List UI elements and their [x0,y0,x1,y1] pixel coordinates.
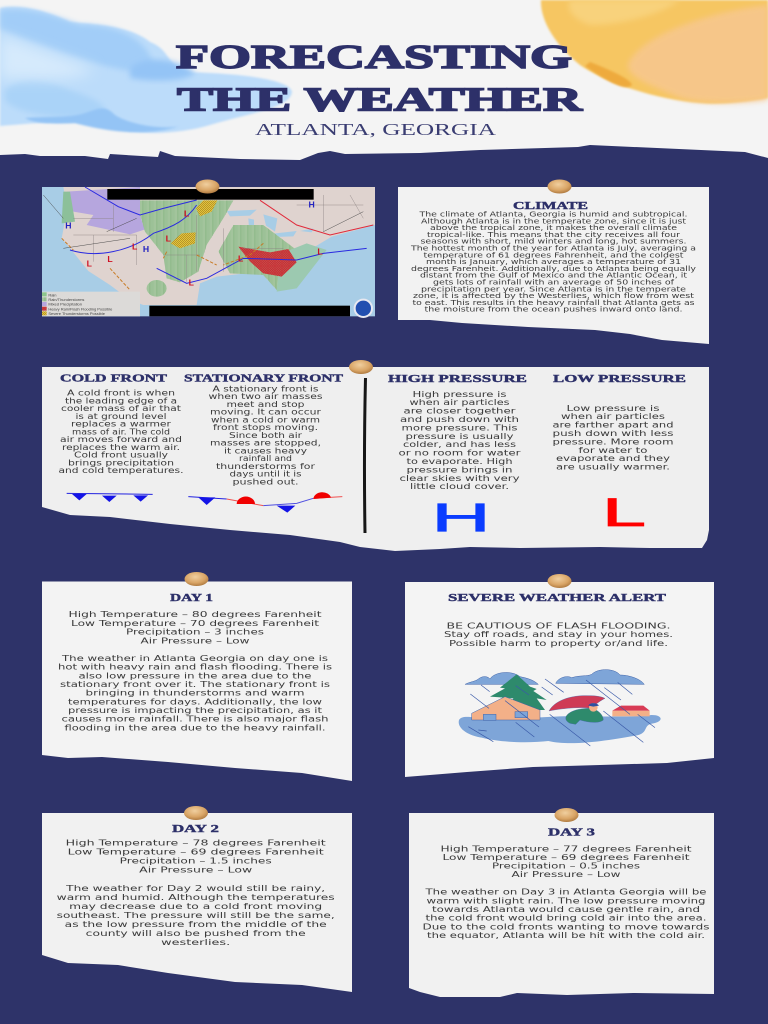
forecast text: southeast. The pressure will still be the same, [57,910,335,920]
stationary front text: when two air masses [208,392,322,401]
forecast text: the equator, Atlanta will be hit with the cold air. [427,930,705,940]
high pressure text: and push down with [400,415,519,424]
panel: day 2 [42,806,352,992]
high pressure text: clear skies with very [400,474,520,483]
stationary front text: moving. It can occur [210,408,322,417]
rain lines [468,679,655,746]
cold front text: is at ground level [76,412,166,421]
climate text: the moisture from the ocean pushes inward onto land. [424,306,682,314]
climate text: degrees Farenheit. Additionally, due to Atlanta being equally [411,265,696,273]
forecast text: warm and humid. Although the temperatures [57,892,335,902]
map legend: Rain [48,292,57,297]
stationary front text: days until it is [230,470,302,479]
map pressure labels: L [317,247,323,257]
map legend [42,292,140,316]
high pressure text: High pressure is [412,390,506,399]
climate text: seasons with short, mild winters and long, hot summers. [420,238,686,246]
map pressure labels: L [189,278,195,288]
heading: DAY 1 [170,593,213,604]
climate text: precipitation per year. Since Atlanta is in the temperate [421,285,686,293]
icon: agency logo [355,300,372,317]
panel: climate [398,180,709,344]
title: THE WEATHER [177,82,583,118]
forecast stats: Air Pressure – Low [140,635,250,645]
stationary front text: front stops moving. [213,423,318,432]
forecast text: bringing in thunderstorms and warm [86,688,305,698]
forecast text: The weather on Day 3 in Atlanta Georgia will be [424,887,706,897]
cold front text [58,389,184,475]
high pressure text: colder, and has less [403,440,516,449]
stationary front text: meet and stop [226,400,305,409]
map pressure labels: L [184,208,190,218]
climate text: distant from the Gulf of Mexico and the Atlantic Ocean, it [420,272,687,280]
climate text: The climate of Atlanta, Georgia is humid and subtropical. [418,210,688,218]
panel: severe weather alert [405,574,714,777]
heading: low pressure: LOW PRESSURE [553,374,686,385]
high pressure text: when air particles [410,398,510,407]
forecast stats: Precipitation – 3 inches [126,627,264,637]
forecast stats: High Temperature – 80 degrees Farenheit [68,609,323,619]
climate text: above the tropical zone, it makes the overall climate [430,224,677,232]
pin [184,572,208,586]
climate text [410,210,696,314]
flood water [459,715,661,743]
forecast text: warm with slight rain. The low pressure moving [426,895,706,905]
forecast stats: Air Pressure – Low [512,869,621,879]
map redaction bars [107,189,350,316]
heading: SEVERE WEATHER ALERT [448,593,666,604]
low pressure text: evaporate and they [556,454,671,463]
pin [184,806,208,820]
forecast text: stationary front over it. The stationary front is [60,679,330,689]
cold front text: Cold front usually [74,450,169,460]
forecast stats: Low Temperature – 70 degrees Farenheit [71,618,320,628]
cold front text: mass of air. The cold [72,427,170,436]
title: FORECASTING [176,39,572,76]
stationary front text: pushed out. [232,477,298,486]
forecast text [57,883,335,947]
forecast stats: Precipitation – 0.5 inches [492,860,640,870]
cold front text: air moves forward and [60,435,182,444]
heading: DAY 3 [548,828,595,839]
subtitle: ATLANTA, GEORGIA [255,120,496,139]
umbrella [549,696,605,711]
heading: DAY 2 [172,824,219,835]
climate text: to east. This results in the heavy rainfall that Atlanta gets as [412,299,695,307]
distant house [612,711,650,716]
low pressure text [552,404,674,472]
forecast text: the cold front would bring cold air into the area. [426,913,706,923]
alert text: BE CAUTIOUS OF FLASH FLOODING. [446,620,670,630]
map legend: Mixed Precipitation [48,302,82,307]
map pressure labels [65,200,323,288]
low pressure text: are farther apart and [552,421,674,430]
cold front text: and cold temperatures. [58,466,184,475]
forecast text: hot with heavy rain and flash flooding. There is [58,662,332,672]
forecast stats: Low Temperature – 69 degrees Farenheit [68,846,325,856]
heading: stationary front: STATIONARY FRONT [184,374,343,384]
icon: high pressure H: H [432,496,490,540]
high pressure text: little cloud cover. [410,482,509,491]
panel: day 1 [42,572,352,781]
icon: watercolor sun [541,0,768,104]
climate text: The hottest month of the year for Atlanta is July, averaging a [410,244,696,252]
forecast text: westerlies. [161,937,230,947]
map pressure labels: L [166,233,172,243]
forecast text: The weather in Atlanta Georgia on day one is [61,653,328,663]
cold front text: cooler mass of air that [61,404,181,413]
forecast stats: Precipitation – 1.5 inches [120,856,272,866]
panel: fronts and pressure [42,360,709,551]
high pressure text [398,390,522,491]
heading: high pressure: HIGH PRESSURE [388,374,527,385]
house [472,697,540,720]
forecast text: as the low pressure from the middle of the [65,919,327,929]
pin [196,180,220,194]
map pressure labels: L [87,259,93,269]
stationary front text: thunderstorms for [216,462,316,471]
forecast text: The weather for Day 2 would still be rainy, [65,883,325,893]
forecast text [422,887,710,940]
high pressure text: more pressure. This [402,423,518,432]
high pressure text: are closer together [404,407,517,416]
stationary front text: A stationary front is [212,384,318,393]
stationary front text: rainfall and [239,454,292,463]
person [566,708,603,724]
cold front text: A cold front is when [67,389,175,398]
divider brush line [364,378,366,533]
forecast text: may decrease due to a cold front moving [69,901,322,911]
stationary front text: when a cold or warm [211,415,320,424]
forecast text: causes more rainfall. There is also major flash [62,714,328,724]
low pressure text: push down with less [552,429,674,438]
alert text: Possible harm to property or/and life. [449,638,668,648]
header band [0,0,768,160]
alert text: Stay off roads, and stay in your homes. [444,629,673,639]
climate text: Although Atlanta is in the temperate zone, since it is just [421,217,686,225]
forecast stats: High Temperature – 78 degrees Farenheit [66,838,327,848]
icon: cold front symbol [67,493,153,502]
cold front text: replaces the warm air. [62,443,180,452]
forecast stats [440,843,693,879]
high pressure text: pressure brings in [406,465,513,474]
map legend: Severe Thunderstorms Possible [48,311,106,316]
cold front text: replaces a warmer [71,420,172,429]
tree [490,674,547,710]
icon: stationary front symbol [188,492,342,513]
forecast stats: Air Pressure – Low [139,864,253,874]
panel: weather map [42,187,375,317]
stationary front text: Since both air [229,431,303,440]
low pressure text: Low pressure is [566,404,660,413]
forecast text: Due to the cold fronts wanting to move towards [422,921,710,931]
clouds [465,670,644,684]
forecast text: county will also be pushed from the [86,928,306,938]
pin [548,574,572,588]
high pressure text: or no room for water [398,449,522,458]
forecast text: towards Atlanta would cause gentle rain, and [432,904,700,914]
alert text [444,620,673,648]
low pressure text: are usually warmer. [556,463,670,472]
pin [554,808,578,822]
forecast text [58,653,332,732]
map legend: Heavy Rain/Flash Flooding Possible [48,306,113,311]
pin [548,180,572,194]
forecast stats: Low Temperature – 69 degrees Farenheit [442,852,691,862]
forecast stats [66,838,327,874]
climate text: zone, it is affected by the Westerlies, which flow from west [413,292,694,300]
climate text: gets lots of rainfall with an average of 50 inches of [433,278,675,286]
cold front text: the leading edge of a [65,396,177,405]
icon: flood illustration [459,670,661,746]
high pressure text: pressure is usually [406,432,514,441]
low pressure text: when air particles [561,412,665,421]
forecast text: temperatures for days. Additionally, the low [68,696,322,706]
low pressure text: for water to [578,446,648,455]
heading: cold front: COLD FRONT [60,374,167,384]
icon: watercolor cloud [0,7,292,133]
icon: low pressure L: L [602,491,646,535]
stationary front text [208,384,322,486]
stationary front text: it causes heavy [224,446,308,455]
title [176,39,583,118]
forecast text: also low pressure in the area due to the [78,670,312,680]
forecast stats: High Temperature – 77 degrees Farenheit [440,843,693,853]
panel: day 3 [409,808,714,997]
pin [349,360,373,374]
map pressure labels: L [132,241,138,251]
climate text: month is January, which averages a temperature of 31 [426,258,681,266]
map pressure labels: H [143,244,149,254]
forecast text: flooding in the area due to the heavy rainfall. [64,722,326,732]
map pressure labels: H [65,221,71,231]
map pressure labels: L [238,254,244,264]
forecast text: pressure is impacting the precipitation, as it [68,705,323,715]
heading: CLIMATE [513,201,588,212]
map pressure labels: L [107,254,113,264]
cold front text: brings precipitation [68,458,174,467]
high pressure text: to evaporate. High [406,457,513,466]
map legend: Rain/Thunderstorms [48,297,84,302]
climate text: tropical-like. This means that the city receives all four [427,231,680,239]
low pressure text: pressure. More room [552,437,674,446]
climate text: temperature of 61 degrees Fahrenheit, and the coldest [424,251,684,259]
forecast stats [68,609,323,645]
map pressure labels: H [309,200,315,210]
stationary front text: masses are stopped, [210,439,321,448]
